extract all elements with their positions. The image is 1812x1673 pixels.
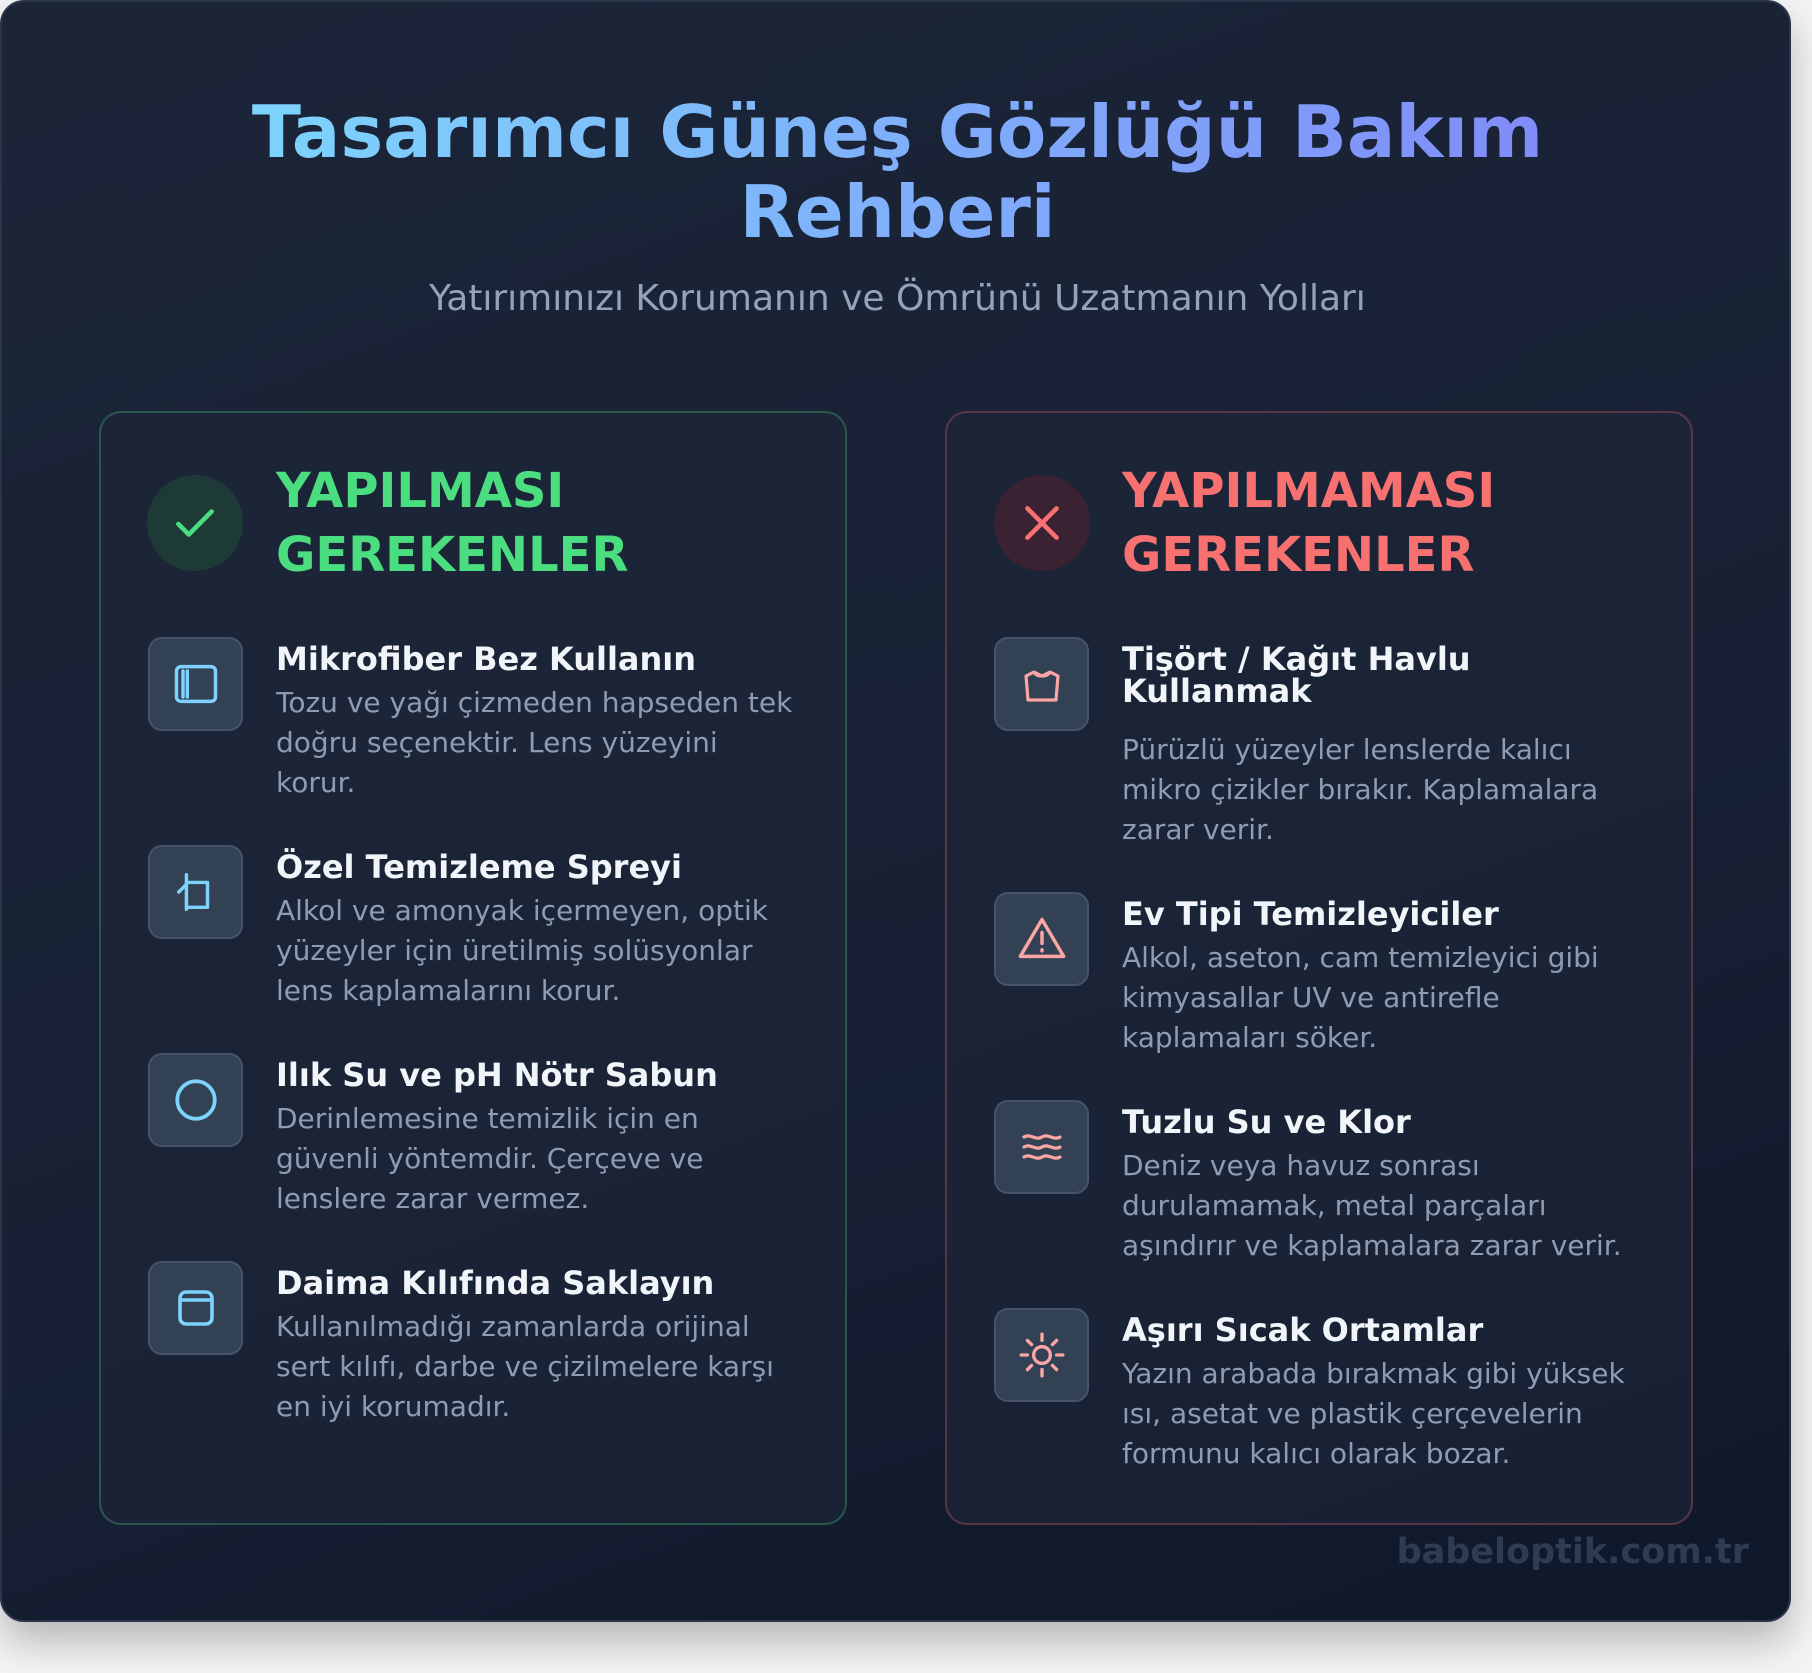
item: ev tipi: Alkol, aseton, cam temizleyici gibi: [1122, 941, 1599, 974]
item: tisort: zarar verir.: [1122, 813, 1274, 846]
item: kilif: sert kılıfı, darbe ve çizilmelere karşı: [276, 1350, 774, 1383]
heading: donts: YAPILMAMASI: [1122, 463, 1495, 519]
item: kilif: en iyi korumadır.: [276, 1390, 510, 1423]
item: tuzlu su: durulamamak, metal parçaları: [1122, 1189, 1547, 1222]
item: mikrofiber: [276, 640, 792, 799]
item: kilif: Kullanılmadığı zamanlarda orijinal: [276, 1310, 750, 1343]
item: ev tipi: Ev Tipi Temizleyiciler: [1122, 895, 1499, 933]
item: tuzlu su: Tuzlu Su ve Klor: [1122, 1103, 1411, 1141]
item: sicak: Aşırı Sıcak Ortamlar: [1122, 1311, 1483, 1349]
icon: sun: [994, 1308, 1089, 1402]
item: sprey: yüzeyler için üretilmiş solüsyonlar: [276, 934, 753, 967]
item: kilif: [276, 1264, 774, 1423]
icon: shirt: [994, 637, 1089, 731]
item: mikrofiber: Tozu ve yağı çizmeden hapseden tek: [276, 686, 792, 719]
item: tuzlu su: aşındırır ve kaplamalara zarar verir.: [1122, 1229, 1622, 1262]
item: sicak: [1122, 1311, 1625, 1470]
item: sicak: formunu kalıcı olarak bozar.: [1122, 1437, 1510, 1470]
item: mikrofiber: korur.: [276, 766, 355, 799]
heading: dos: GEREKENLER: [276, 527, 628, 583]
item: su: Ilık Su ve pH Nötr Sabun: [276, 1056, 718, 1094]
icon: warning: [994, 892, 1089, 986]
title: Rehberi: [739, 170, 1056, 254]
item: ev tipi: kimyasallar UV ve antirefle: [1122, 981, 1500, 1014]
panel: dos: [99, 411, 847, 1525]
icon: circle: [148, 1053, 243, 1147]
item: su: güvenli yöntemdir. Çerçeve ve: [276, 1142, 704, 1175]
item: tisort: Kullanmak: [1122, 672, 1312, 710]
item: tisort: mikro çizikler bırakır. Kaplamalara: [1122, 773, 1598, 806]
item: tuzlu su: [1122, 1103, 1622, 1262]
item: ev tipi: [1122, 895, 1599, 1054]
heading: donts: GEREKENLER: [1122, 527, 1474, 583]
item: sprey: [276, 848, 768, 1007]
title: Tasarımcı Güneş Gözlüğü Bakım: [252, 90, 1543, 174]
panel: donts: [945, 411, 1693, 1525]
heading: dos: [276, 463, 628, 583]
item: su: [276, 1056, 718, 1215]
heading: donts: [1122, 463, 1495, 583]
item: mikrofiber: doğru seçenektir. Lens yüzeyini: [276, 726, 718, 759]
item: su: lenslere zarar vermez.: [276, 1182, 589, 1215]
item: tisort: [1122, 640, 1598, 846]
item: kilif: Daima Kılıfında Saklayın: [276, 1264, 714, 1302]
item: tisort: Pürüzlü yüzeyler lenslerde kalıcı: [1122, 733, 1572, 766]
item: sprey: Alkol ve amonyak içermeyen, optik: [276, 894, 768, 927]
icon: case: [148, 1261, 243, 1355]
item: sprey: Özel Temizleme Spreyi: [276, 848, 682, 886]
item: tuzlu su: Deniz veya havuz sonrası: [1122, 1149, 1480, 1182]
icon: check circle: [147, 475, 243, 571]
item: mikrofiber: Mikrofiber Bez Kullanın: [276, 640, 696, 678]
icon: spray: [148, 845, 243, 939]
item: sicak: Yazın arabada bırakmak gibi yüksek: [1122, 1357, 1625, 1390]
icon: cross circle: [994, 475, 1090, 571]
item: tisort: Tişört / Kağıt Havlu: [1122, 640, 1471, 678]
item: sprey: lens kaplamalarını korur.: [276, 974, 620, 1007]
item: ev tipi: kaplamaları söker.: [1122, 1021, 1377, 1054]
heading: dos: YAPILMASI: [276, 463, 564, 519]
subtitle: Yatırımınızı Korumanın ve Ömrünü Uzatmanın Yolları: [429, 278, 1366, 319]
icon: cloth: [148, 637, 243, 731]
icon: waves: [994, 1100, 1089, 1194]
item: su: Derinlemesine temizlik için en: [276, 1102, 699, 1135]
title: [252, 90, 1543, 254]
watermark: babeloptik.com.tr: [1397, 1532, 1749, 1572]
item: sicak: ısı, asetat ve plastik çerçevelerin: [1122, 1397, 1583, 1430]
